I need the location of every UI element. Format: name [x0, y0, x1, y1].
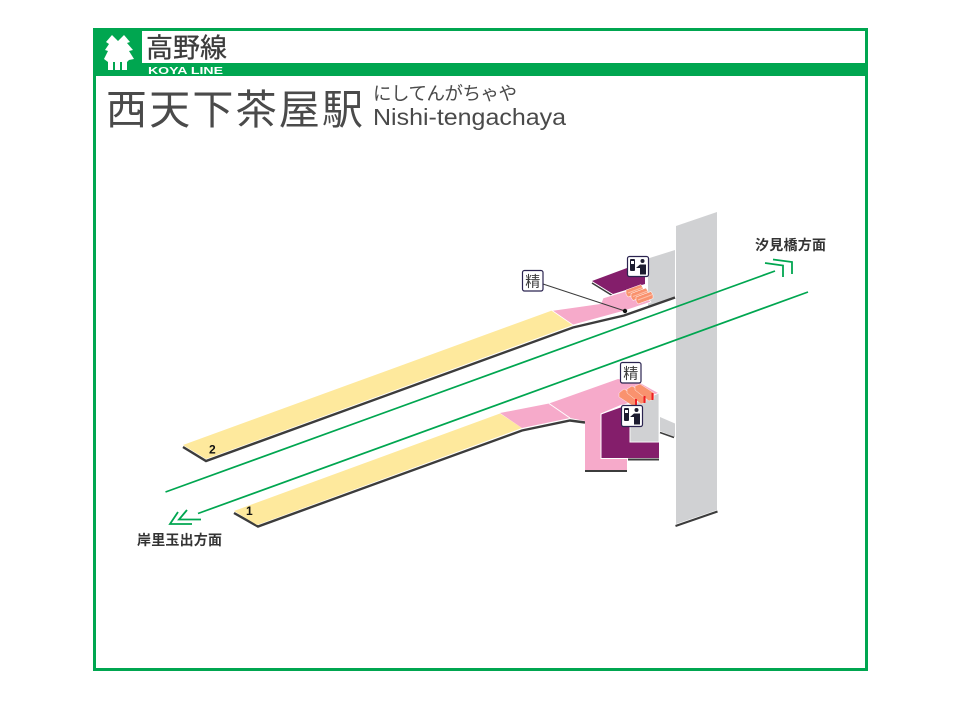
station romaji: Nishi-tengachaya [373, 104, 566, 130]
green track line upper [166, 271, 775, 492]
platform number 2: 2 [209, 442, 216, 456]
purple area upper [592, 268, 645, 296]
building annex upper [648, 250, 675, 306]
fare adjustment label lower [620, 362, 641, 383]
platform 1 [234, 414, 585, 526]
gray room lower [630, 393, 659, 442]
icon: station staff upper [628, 256, 648, 276]
platform 2 [183, 298, 675, 461]
green track line lower [198, 292, 808, 514]
line name english: KOYA LINE [148, 65, 223, 77]
fare adjustment label upper: 精 [525, 274, 540, 290]
icon: pine trees [104, 35, 134, 70]
concourse building [676, 212, 718, 526]
frame [94, 30, 866, 670]
building annex lower [660, 417, 675, 438]
purple area lower [601, 407, 659, 458]
fare adjustment label upper [522, 270, 627, 313]
direction label: Kishinosato-Tamade: 岸里玉出方面 [137, 532, 222, 548]
platform number 1: 1 [246, 504, 253, 518]
ticket gates upper [626, 284, 653, 304]
pink concourse upper [552, 290, 651, 325]
direction label: Shiomibashi: 汐見橋方面 [755, 237, 826, 253]
pink concourse lower [500, 379, 659, 471]
station name: 西天下茶屋駅 [106, 87, 363, 133]
arrow: to Kishinosato-Tamade [170, 510, 201, 524]
station reading: にしてんがちゃや [373, 83, 517, 104]
line name: 高野線 [146, 34, 227, 64]
fare adjustment label lower: 精 [623, 366, 638, 382]
ticket gates lower [619, 384, 654, 406]
header band [95, 30, 867, 77]
icon: station staff lower [622, 406, 642, 426]
arrow: to Shiomibashi [765, 260, 792, 277]
